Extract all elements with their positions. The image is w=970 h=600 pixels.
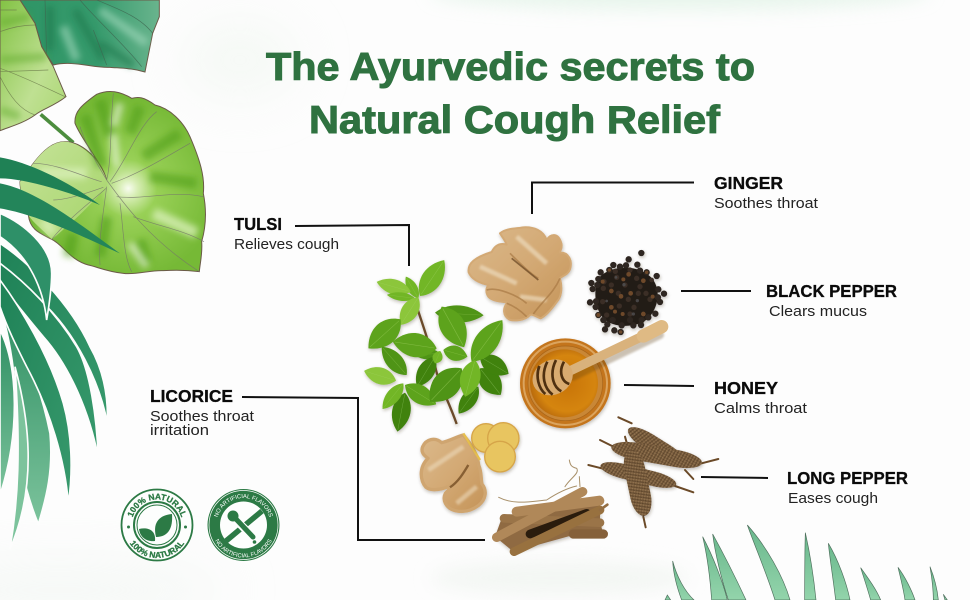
frond	[0, 307, 51, 524]
connector: tulsi	[295, 225, 409, 266]
blade	[805, 533, 816, 600]
ginger root	[469, 227, 571, 320]
badge: 100% natural: 100% NATURAL	[130, 540, 184, 558]
blade	[898, 567, 915, 600]
title: Natural Cough Relief	[309, 99, 721, 142]
blade	[943, 594, 947, 600]
leaf: big round leaf	[20, 91, 205, 274]
connector: honey	[624, 385, 694, 386]
title	[266, 46, 755, 142]
blade	[713, 534, 746, 600]
label: black pepper: BLACK PEPPER	[766, 281, 897, 301]
foliage: top-left leaves	[0, 0, 205, 274]
label: ginger	[714, 173, 818, 212]
blade	[828, 543, 850, 600]
label: tulsi: TULSI	[234, 214, 282, 234]
badge: no artificial flavors: NO ARTIFICIAL FLAVORS	[215, 538, 272, 558]
blade	[673, 561, 694, 600]
ginger with slices	[421, 423, 519, 511]
label: long pepper: Eases cough	[788, 491, 878, 507]
blade	[930, 567, 938, 600]
label: licorice: Soothes throat	[150, 409, 254, 425]
foliage: left palm fronds	[0, 157, 120, 549]
ginger root	[421, 435, 485, 511]
icon: leaves	[139, 514, 172, 541]
foliage: bottom-right blades	[665, 525, 947, 600]
connector: licorice	[242, 397, 485, 540]
frond	[0, 330, 14, 495]
stem	[417, 308, 457, 424]
badge: 100% natural	[120, 488, 194, 562]
label: licorice	[150, 386, 254, 439]
badge: 100% natural: 100% NATURAL	[128, 494, 186, 518]
leaf: dark green top	[20, 0, 159, 72]
frond	[0, 183, 120, 253]
frond	[0, 157, 100, 205]
label: licorice: irritation	[150, 423, 209, 439]
frond	[0, 263, 98, 458]
label: honey: Calms throat	[714, 401, 807, 417]
blade	[665, 595, 671, 600]
blade	[703, 537, 727, 600]
badge: no artificial flavors: NO ARTIFICIAL FLAVORS	[214, 494, 273, 517]
frond	[0, 243, 107, 423]
connector: ginger	[532, 182, 694, 214]
honey jar	[520, 327, 662, 428]
label: licorice: LICORICE	[150, 386, 233, 406]
leaf lobe	[20, 142, 107, 239]
tulsi leaves	[361, 254, 513, 433]
tulsi sprig	[361, 254, 513, 433]
leaf: light green top-left	[0, 0, 66, 131]
connector: black pepper	[681, 290, 751, 292]
label: ginger: GINGER	[714, 173, 783, 193]
badge: no artificial flavors	[208, 489, 280, 561]
leaf stem	[41, 114, 73, 143]
label: tulsi: Relieves cough	[234, 237, 339, 253]
label: tulsi	[234, 214, 339, 253]
licorice roots	[495, 460, 607, 552]
label: long pepper	[787, 468, 908, 507]
label: ginger: Soothes throat	[714, 196, 818, 212]
label: honey	[714, 378, 807, 417]
label: honey: HONEY	[714, 378, 778, 398]
black pepper	[587, 250, 667, 335]
blade	[861, 568, 881, 600]
ginger slices	[472, 423, 519, 472]
label: black pepper	[766, 281, 897, 320]
connector: long pepper	[701, 477, 768, 478]
frond	[0, 213, 52, 320]
blade	[747, 525, 790, 600]
long pepper	[588, 417, 718, 527]
title: The Ayurvedic secrets to	[266, 46, 755, 89]
frond	[10, 367, 28, 549]
icon: crossed dropper	[226, 510, 262, 544]
frond	[0, 280, 71, 503]
label: black pepper: Clears mucus	[769, 304, 867, 320]
honey dipper	[527, 327, 662, 402]
label: long pepper: LONG PEPPER	[787, 468, 908, 488]
